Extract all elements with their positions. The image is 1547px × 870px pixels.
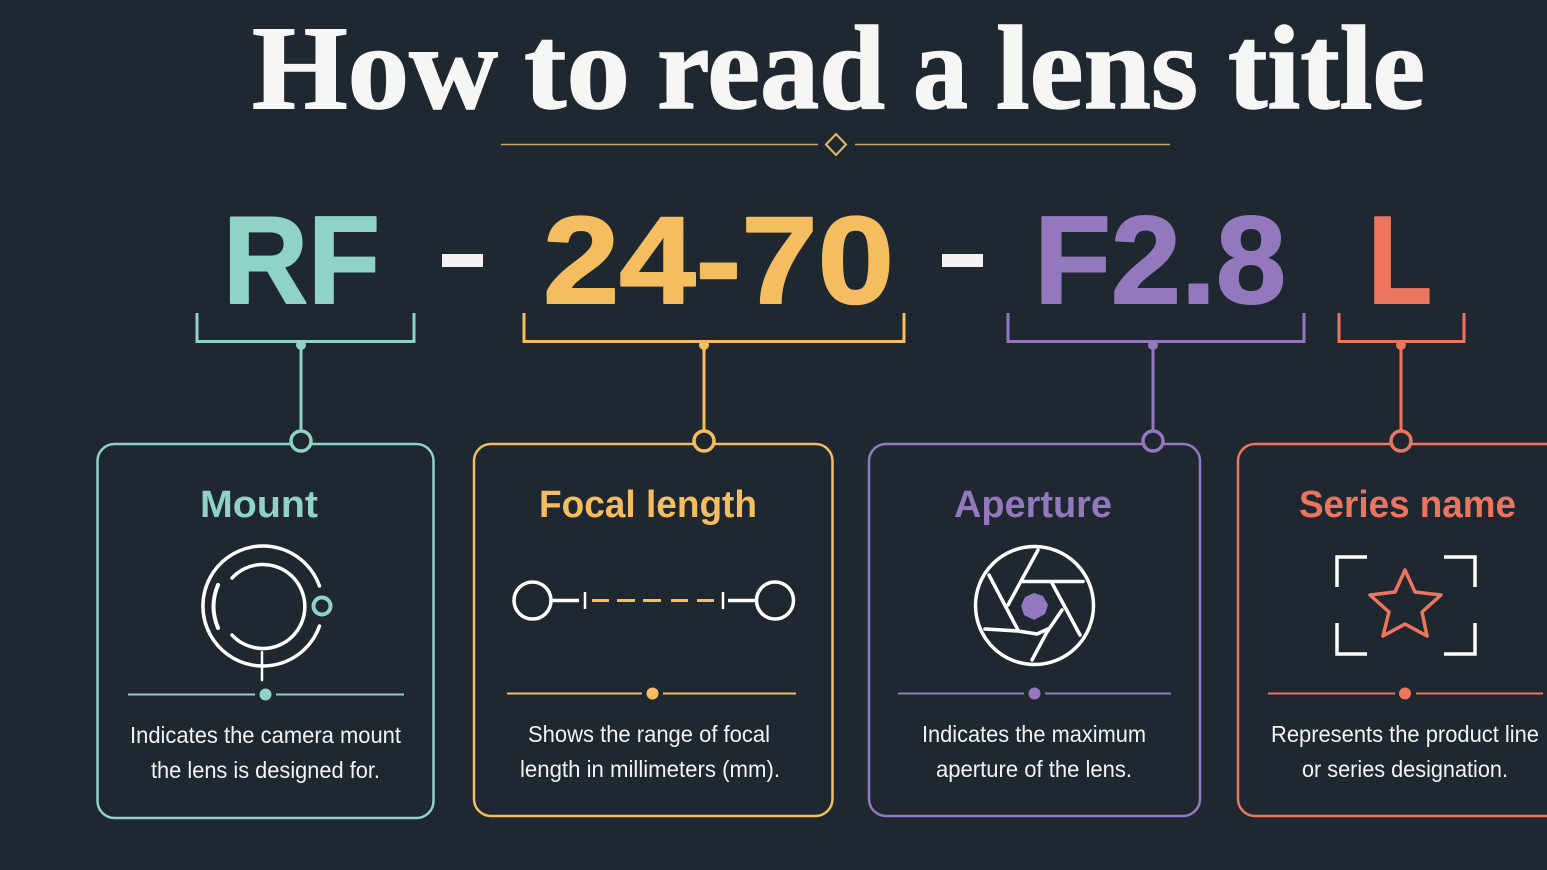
description: aperture <box>922 721 1146 782</box>
panel: mount <box>98 431 434 818</box>
divider: mount <box>128 688 404 700</box>
panel: focal length <box>474 431 832 816</box>
title: lens <box>996 1 1198 134</box>
title: title <box>1228 1 1425 134</box>
bracket connector: series <box>1339 313 1464 431</box>
bracket connector: aperture <box>1008 313 1304 431</box>
icon: star in frame <box>1337 557 1475 654</box>
code segment: L: L <box>1368 192 1432 330</box>
separator dash 2 <box>942 254 983 267</box>
title: read <box>657 1 885 134</box>
title: How <box>252 1 498 134</box>
description: mount: Indicates the camera mount <box>130 722 402 748</box>
description: focal length <box>520 721 780 782</box>
heading: aperture: Aperture <box>954 484 1112 526</box>
description: mount: the lens is designed for. <box>151 757 380 783</box>
icon: lens mount rings <box>203 546 330 680</box>
separator dash 1 <box>442 254 483 267</box>
title: a <box>913 1 968 134</box>
description: focal length: length in millimeters (mm). <box>520 756 780 782</box>
icon: aperture blades <box>976 546 1094 664</box>
code segment: F2.8: F2.8 <box>1034 192 1286 330</box>
description: focal length: Shows the range of focal <box>528 721 770 747</box>
divider: focal length <box>507 688 796 700</box>
heading: series name: Series name <box>1299 484 1516 526</box>
code segment: 24-70: 24-70 <box>543 192 894 330</box>
heading: mount: Mount <box>200 484 318 526</box>
panel: series name <box>1238 431 1547 816</box>
description: series name <box>1271 721 1539 782</box>
panel: aperture <box>869 431 1200 816</box>
description: aperture: aperture of the lens. <box>936 756 1132 782</box>
bracket connector: focal length <box>524 313 904 431</box>
icon: focal range <box>514 582 794 619</box>
divider: series name <box>1268 688 1543 700</box>
description: series name: or series designation. <box>1302 756 1508 782</box>
heading: focal length: Focal length <box>539 484 757 526</box>
description: series name: Represents the product line <box>1271 721 1539 747</box>
code segment: RF: RF <box>223 192 380 330</box>
title: to <box>524 1 630 134</box>
description: mount <box>130 722 402 783</box>
divider: aperture <box>898 688 1171 700</box>
description: aperture: Indicates the maximum <box>922 721 1146 747</box>
title divider with diamond <box>501 134 1170 155</box>
bracket connector: mount <box>197 313 414 431</box>
